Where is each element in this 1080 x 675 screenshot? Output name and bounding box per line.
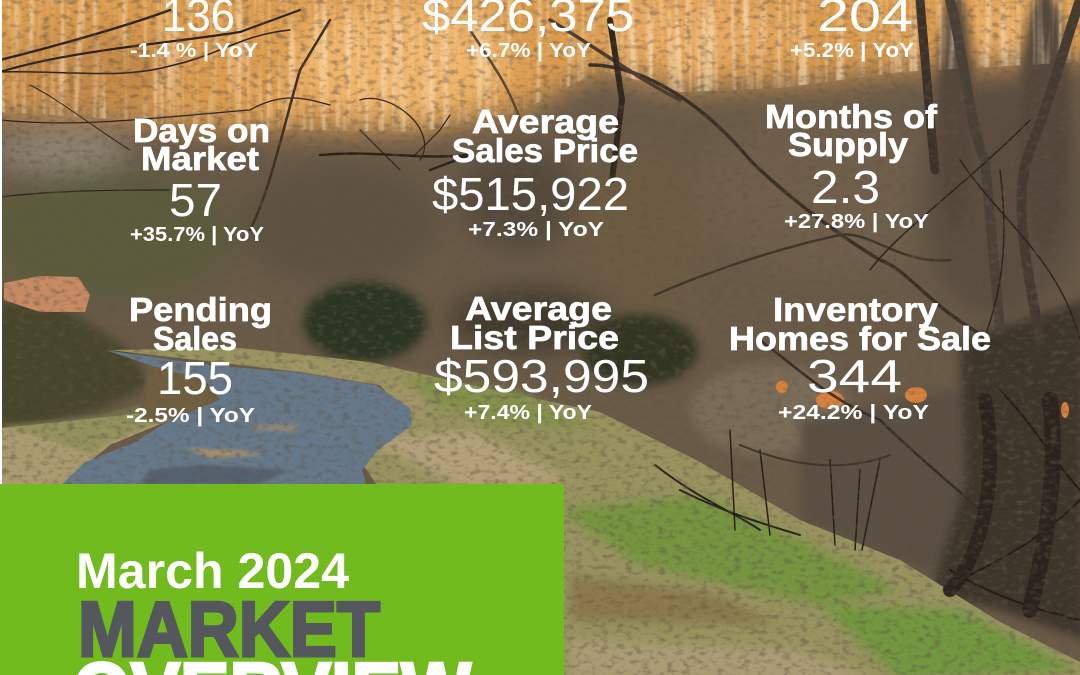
sunlit vertical tree streaks: [0, 0, 1080, 135]
metric: average sales price: $515,922: [432, 168, 629, 220]
hillside grass: [110, 348, 1080, 675]
heading: MARKET: MARKET: [78, 585, 380, 673]
rock: [4, 276, 90, 312]
metric: inventory homes for sale: +24.2% | YoY: [778, 402, 930, 424]
metric: inventory homes for sale: Inventory: [773, 291, 939, 328]
metric: pending sales: Sales: [153, 320, 237, 357]
metric: average sales price: Sales Price: [452, 132, 638, 169]
orange markers: [776, 381, 1069, 418]
metric: average list price: +7.4% | YoY: [464, 402, 593, 424]
metric: months of supply: 2.3: [811, 161, 880, 213]
dark shrubs: [303, 282, 427, 362]
metric: closed sales (cropped label): [130, 0, 259, 62]
metric: median sales price (cropped label): [422, 0, 634, 62]
metric: days on market: 57: [169, 174, 222, 226]
metric: average list price: List Price: [450, 319, 619, 356]
metric: new listings (cropped label): +5.2% | YoY: [790, 40, 915, 62]
metric: average sales price: +7.3% | YoY: [468, 219, 605, 241]
metric: inventory homes for sale: [729, 291, 991, 424]
metric: days on market: Market: [141, 140, 259, 177]
metric: median sales price (cropped label): +6.7% | YoY: [466, 40, 592, 62]
metric: pending sales: -2.5% | YoY: [126, 405, 256, 427]
metric: days on market: Days on: [133, 112, 270, 149]
metric: months of supply: +27.8% | YoY: [784, 211, 930, 233]
gravel road: [56, 350, 412, 490]
metric: pending sales: Pending: [129, 291, 272, 328]
metric: pending sales: 155: [157, 352, 233, 404]
metric: days on market: +35.7% | YoY: [130, 224, 265, 246]
panel: green title block: [0, 484, 564, 675]
metric: average sales price: [432, 103, 638, 241]
metric: new listings (cropped label): [790, 0, 915, 62]
metric: months of supply: [765, 98, 938, 233]
metric: closed sales (cropped label): -1.4 % | YoY: [130, 40, 259, 62]
heading: March 2024: March 2024: [76, 543, 349, 599]
metric: average list price: $593,995: [434, 350, 649, 402]
metric: average sales price: Average: [472, 103, 619, 140]
metric: inventory homes for sale: Homes for Sale: [729, 320, 991, 357]
metric: inventory homes for sale: 344: [807, 350, 902, 402]
metric: pending sales: [126, 291, 272, 427]
metric: days on market: [130, 112, 270, 246]
metric: average list price: Average: [465, 290, 612, 327]
tan ground left: [2, 413, 170, 484]
metric: months of supply: Months of: [765, 98, 938, 135]
metric: average list price: [434, 290, 649, 424]
metric: months of supply: Supply: [788, 126, 909, 163]
